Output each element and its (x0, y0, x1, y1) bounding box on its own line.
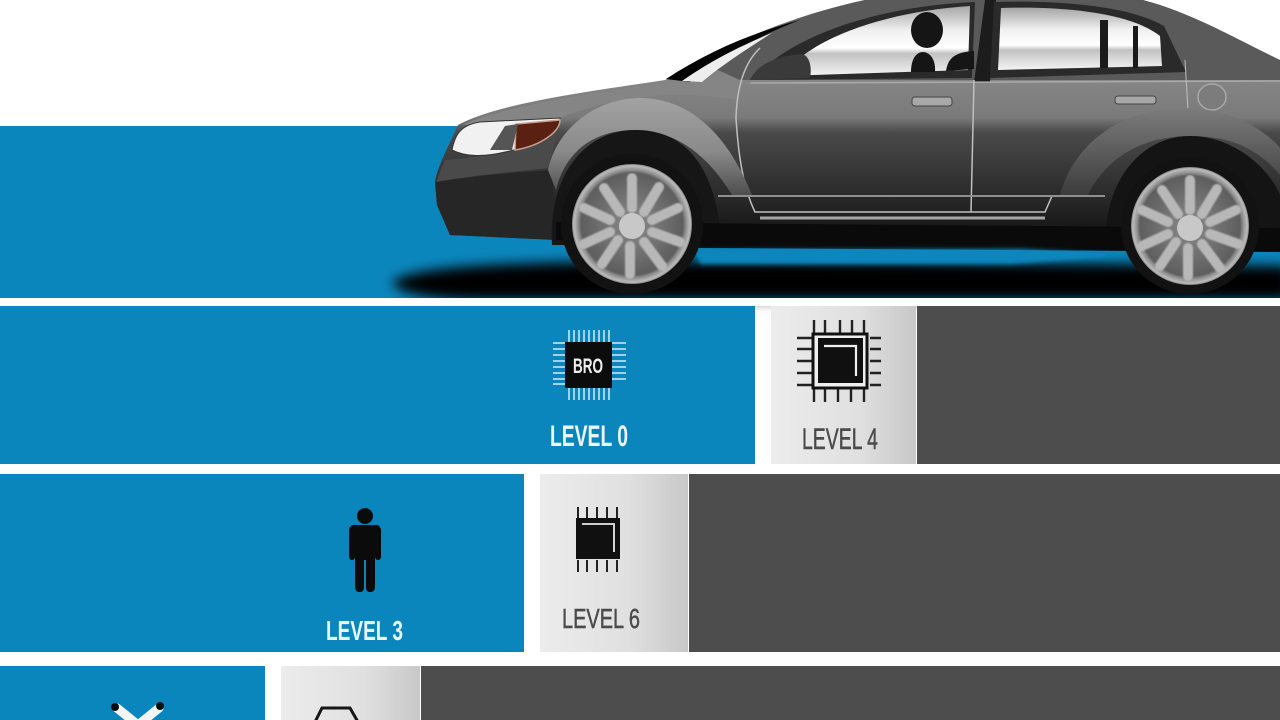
icon: car outline (315, 708, 358, 720)
icon: person (349, 508, 381, 592)
headlight (452, 118, 560, 156)
fuel door (1198, 84, 1226, 110)
panel: row 4 dark bar (421, 666, 1280, 720)
front wheel (564, 164, 699, 294)
blue road glimpse under car (695, 249, 1130, 264)
side mirror (750, 54, 811, 80)
rear wheel (1126, 167, 1254, 294)
icon: chip with BRO mark (553, 330, 626, 400)
panel: row 2 blue bar, level 0 (0, 306, 755, 464)
panel: row 2 light tile, level 4 (771, 306, 916, 464)
panel: row 4 light tile (281, 666, 420, 720)
rear wheel arch (1060, 108, 1280, 220)
label: level 3: LEVEL 3 (326, 615, 403, 646)
lower bumper (435, 170, 556, 240)
door seams (718, 48, 1188, 218)
band divider under car (0, 298, 1280, 306)
door handles (912, 96, 1156, 106)
panel: row 3 dark bar (689, 474, 1280, 652)
windshield (666, 20, 800, 82)
panel: row 3 blue bar, level 3 (0, 474, 524, 652)
car shadow on road (392, 261, 1280, 300)
panel: row 3 light tile, level 6 (540, 474, 688, 652)
icon: crossed sticks (111, 702, 164, 720)
roof and pillar shading (700, 0, 1280, 80)
car illustration (435, 0, 1280, 294)
front wheel arch (548, 98, 752, 245)
label: level 6: LEVEL 6 (562, 603, 640, 634)
front fascia above bumper (436, 125, 560, 182)
icon: small chip (576, 507, 620, 572)
icon: chip with BRO mark: BRO (573, 355, 603, 378)
panel: top blue band behind car (0, 126, 1280, 298)
underbody (556, 222, 1280, 252)
label: level 4: LEVEL 4 (802, 423, 878, 456)
rear side window (990, 2, 1186, 78)
hood highlight (462, 108, 586, 125)
front side window (752, 2, 975, 80)
label: level 0: LEVEL 0 (550, 420, 628, 453)
panel: row 4 blue bar (0, 666, 265, 720)
occupant silhouette (911, 12, 974, 72)
icon: chip outline (797, 320, 881, 402)
car body (435, 0, 1280, 245)
belt line highlight (750, 81, 1280, 83)
B pillar (974, 0, 996, 82)
panel: row 2 dark bar (917, 306, 1280, 464)
